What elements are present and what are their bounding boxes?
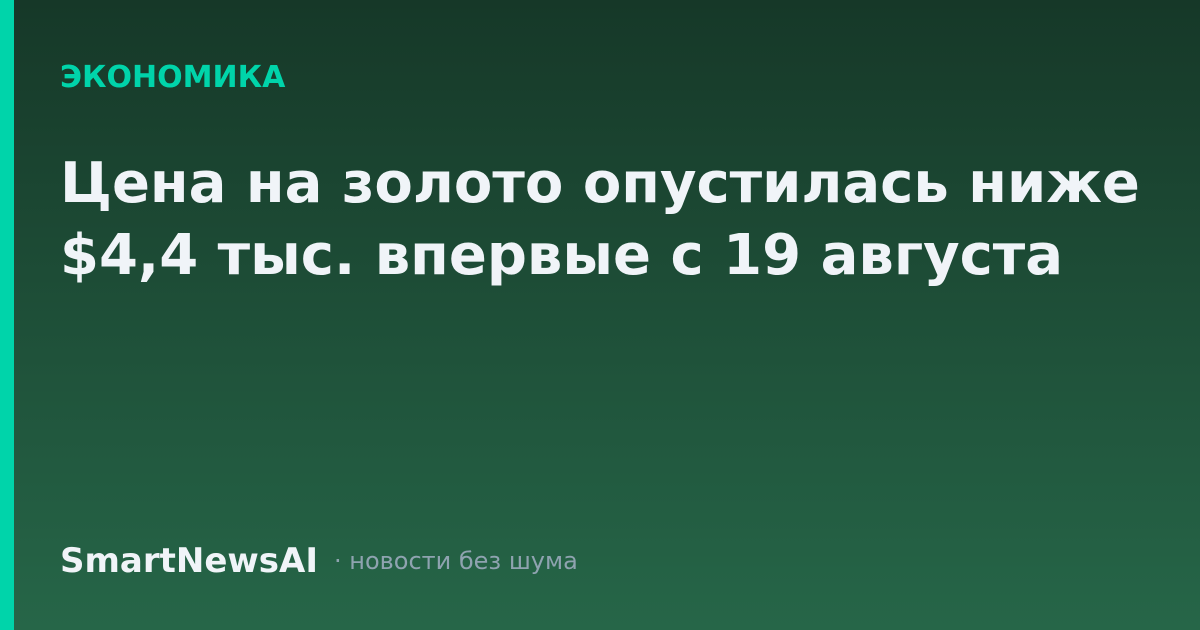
headline: $4,4 тыс. впервые с 19 августа bbox=[60, 223, 1063, 288]
headline: Цена на золото опустилась ниже bbox=[60, 151, 1140, 216]
footer brand: SmartNewsAI bbox=[60, 541, 318, 581]
accent bar bbox=[0, 0, 14, 630]
headline bbox=[60, 151, 1140, 288]
footer tagline: · новости без шума bbox=[334, 547, 578, 575]
category label: ЭКОНОМИКА bbox=[60, 60, 285, 95]
